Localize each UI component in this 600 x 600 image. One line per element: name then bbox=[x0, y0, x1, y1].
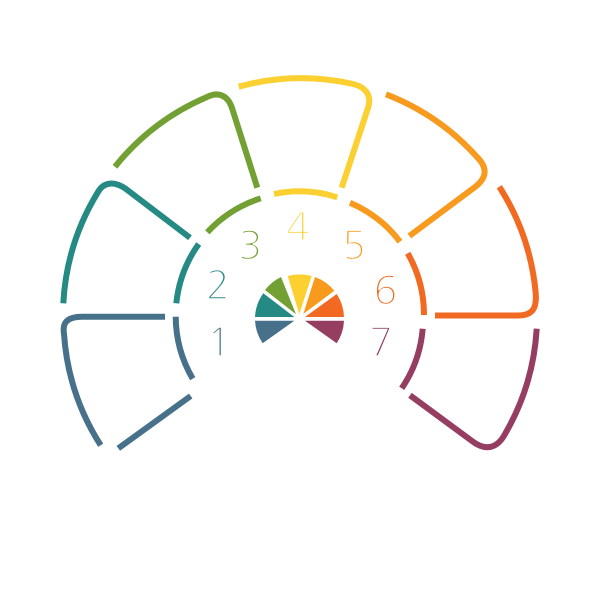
number 2: 2 bbox=[206, 266, 230, 305]
number 4: 4 bbox=[286, 207, 310, 246]
numbers 1 to 7 bbox=[206, 207, 397, 362]
central fan of seven wedges bbox=[255, 274, 344, 343]
wedge 1 bbox=[255, 321, 294, 343]
inner arc 6 bbox=[408, 253, 424, 315]
number 3: 3 bbox=[239, 226, 262, 265]
inner arc 1 bbox=[176, 317, 193, 379]
outer outline 6 bbox=[435, 187, 536, 316]
wedge 4 bbox=[288, 274, 312, 314]
outer outline 4 bbox=[239, 78, 369, 188]
inner arc 4 bbox=[274, 191, 337, 197]
inner arc 5 bbox=[350, 203, 400, 242]
number 7: 7 bbox=[369, 323, 393, 362]
wedge 3 bbox=[265, 277, 296, 314]
outer outline 3 bbox=[115, 94, 257, 188]
inner arc 7 bbox=[402, 329, 423, 388]
wedge 5 bbox=[303, 277, 334, 314]
wedge 6 bbox=[305, 294, 344, 317]
outer outline 5 bbox=[386, 94, 485, 236]
outer outline 2 bbox=[63, 184, 190, 303]
lower edge 1 bbox=[118, 396, 191, 448]
segment 2: teal bbox=[63, 184, 199, 303]
inner arc 2 bbox=[176, 244, 199, 303]
outer outline 7 bbox=[410, 329, 537, 447]
number 6: 6 bbox=[374, 271, 397, 310]
segment 4: yellow bbox=[239, 78, 369, 197]
outer outline 1 bbox=[64, 317, 165, 445]
segment 1: blue bbox=[64, 317, 193, 448]
wedge 2 bbox=[255, 293, 294, 317]
segment 5: orange bbox=[350, 94, 485, 242]
number 5: 5 bbox=[342, 226, 366, 265]
number 1: 1 bbox=[207, 323, 231, 362]
inner arc 3 bbox=[207, 198, 261, 232]
segment 3: green bbox=[115, 94, 261, 232]
wedge 7 bbox=[305, 321, 344, 343]
segment 7: purple bbox=[402, 329, 537, 447]
segment 6: red-orange bbox=[408, 187, 536, 316]
